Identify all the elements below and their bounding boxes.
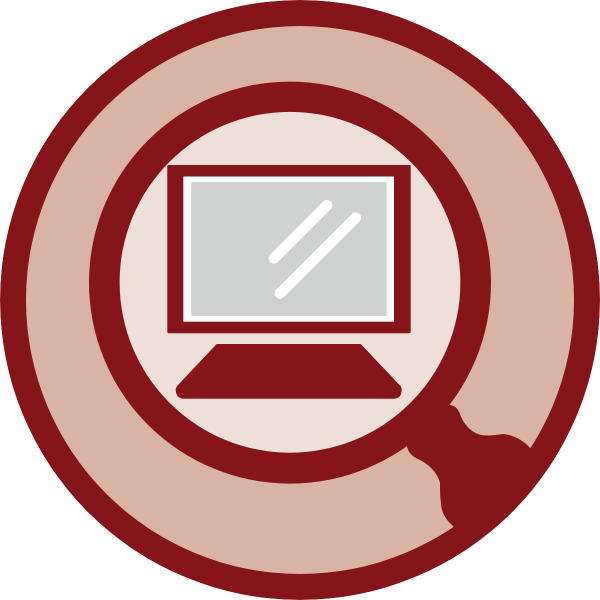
magnifier lens glass [120,112,460,453]
magnifier handle [380,405,600,600]
keyboard base [176,344,402,399]
monitor screen [191,182,387,316]
monitor white bezel [183,176,394,322]
screen glare lines [274,205,356,293]
magnifier lens ring [89,82,491,484]
monitor frame [167,165,411,333]
computer monitor [167,165,411,333]
